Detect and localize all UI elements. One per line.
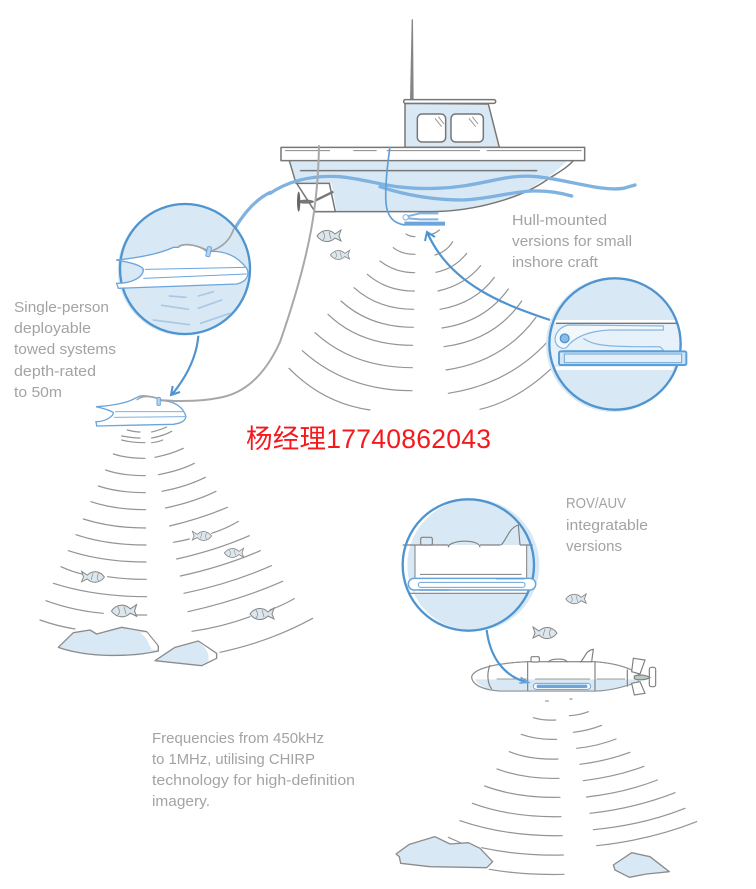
label: hull-mounted versions: inshore craft <box>512 254 599 271</box>
ROV sonar rail <box>408 578 536 590</box>
ROV vehicle <box>472 649 656 695</box>
ROV hull fittings <box>421 525 520 547</box>
contact text in red: 杨经理17740862043 <box>246 424 491 454</box>
transducer array <box>559 351 686 365</box>
blue waterline waves <box>270 176 635 193</box>
cabin roof <box>404 100 496 103</box>
towed sonar beam arcs <box>40 427 313 652</box>
towed sonar device <box>96 396 186 426</box>
callout circle: hull mounted transducer <box>546 277 686 412</box>
hull fill <box>285 162 567 212</box>
label: frequencies: technology for high-definition <box>152 772 355 789</box>
label: ROV/AUV versions: ROV/AUV <box>566 495 626 512</box>
label: towed systems: to 50m <box>14 384 62 401</box>
label: towed systems: deployable <box>14 320 91 337</box>
hull transducer <box>403 213 445 226</box>
towed sonar body <box>116 245 248 288</box>
callout circle: ROV integrated sonar <box>403 499 539 631</box>
seabed rocks: ROV area <box>396 837 669 877</box>
hull outline <box>289 161 573 212</box>
beam arcs in callout <box>153 292 230 325</box>
ROV sonar array <box>533 683 591 689</box>
hull sonar beam arcs <box>289 230 557 410</box>
transducer bracket <box>555 325 663 348</box>
label: hull-mounted versions: Hull-mounted <box>512 212 607 229</box>
label: towed systems: Single-person <box>14 299 109 316</box>
hull transducer cable <box>386 147 405 225</box>
cabin <box>405 103 499 147</box>
arrow: callout to towed sonar <box>171 336 198 395</box>
label: towed systems: depth-rated <box>14 363 96 380</box>
callout circle: towed sonar <box>116 204 250 336</box>
label: towed systems: towed systems <box>14 341 116 358</box>
outboard motor <box>297 183 335 212</box>
ROV tail and propeller <box>632 658 656 695</box>
mast <box>410 19 414 100</box>
tow cable <box>173 146 319 401</box>
label: frequencies: imagery. <box>152 793 210 810</box>
seabed rocks: towed area <box>58 627 217 666</box>
ROV sensors and fin <box>531 649 593 662</box>
arrow: callout to ROV sonar <box>487 630 528 683</box>
label: hull-mounted versions: versions for small <box>512 233 632 250</box>
cabin windows <box>417 114 483 142</box>
label: frequencies: Frequencies from 450kHz <box>152 730 324 747</box>
arrow: callout to hull transducer <box>425 232 550 320</box>
label: frequencies: to 1MHz, utilising CHIRP <box>152 751 315 768</box>
label: ROV/AUV versions: integratable <box>566 517 648 534</box>
ROV sonar beam arcs <box>448 699 697 874</box>
label: ROV/AUV versions: versions <box>566 538 622 555</box>
deck <box>281 147 585 161</box>
blue link: boat to towed callout <box>235 192 271 228</box>
boat <box>270 19 635 226</box>
fish <box>82 230 586 639</box>
